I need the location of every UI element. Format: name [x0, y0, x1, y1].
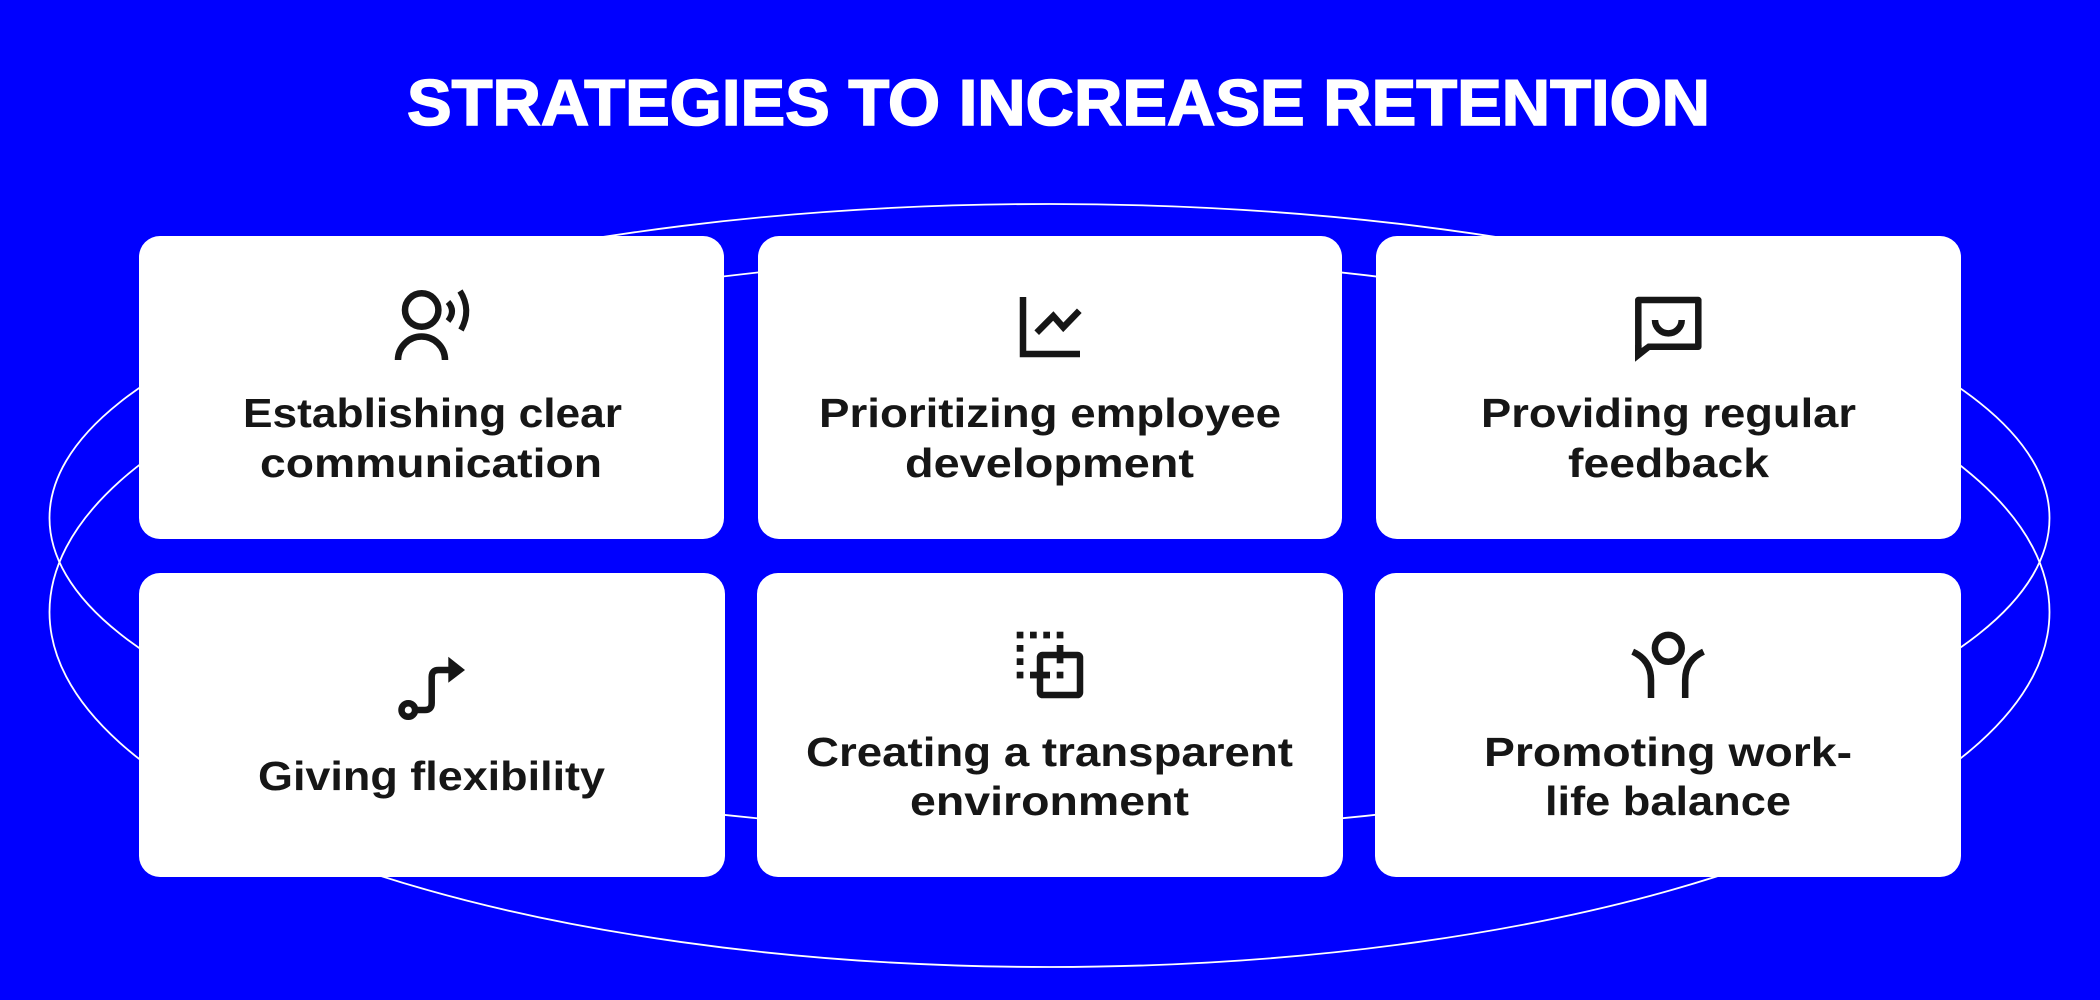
label: development — [905, 440, 1194, 486]
panel: establishing clear communication — [139, 236, 724, 539]
label: Promoting work- — [1484, 729, 1852, 775]
label: Prioritizing employee — [819, 390, 1281, 436]
panel: promoting work-life balance — [1375, 573, 1961, 877]
panel: creating a transparent environment — [757, 573, 1343, 877]
label: communication — [260, 440, 602, 486]
icon: person speaking — [398, 291, 466, 360]
label: Creating a transparent — [806, 729, 1293, 775]
label: Giving flexibility — [258, 753, 605, 799]
title: STRATEGIES TO INCREASE RETENTION — [407, 66, 1710, 139]
icon: dotted square and solid square — [1017, 632, 1080, 695]
panel: providing regular feedback — [1376, 236, 1961, 539]
panel: giving flexibility — [139, 573, 725, 877]
icon: person with raised arms — [1633, 635, 1704, 698]
background ellipses — [50, 204, 2050, 967]
icon: line chart — [1023, 297, 1080, 354]
icon: route arrow — [402, 657, 465, 717]
label: environment — [910, 778, 1189, 824]
label: feedback — [1568, 440, 1769, 486]
panel: prioritizing employee development — [758, 236, 1342, 539]
label: Establishing clear — [243, 390, 622, 436]
icon: smiling speech bubble — [1635, 300, 1698, 362]
label: Providing regular — [1481, 390, 1856, 436]
label: life balance — [1545, 778, 1791, 824]
